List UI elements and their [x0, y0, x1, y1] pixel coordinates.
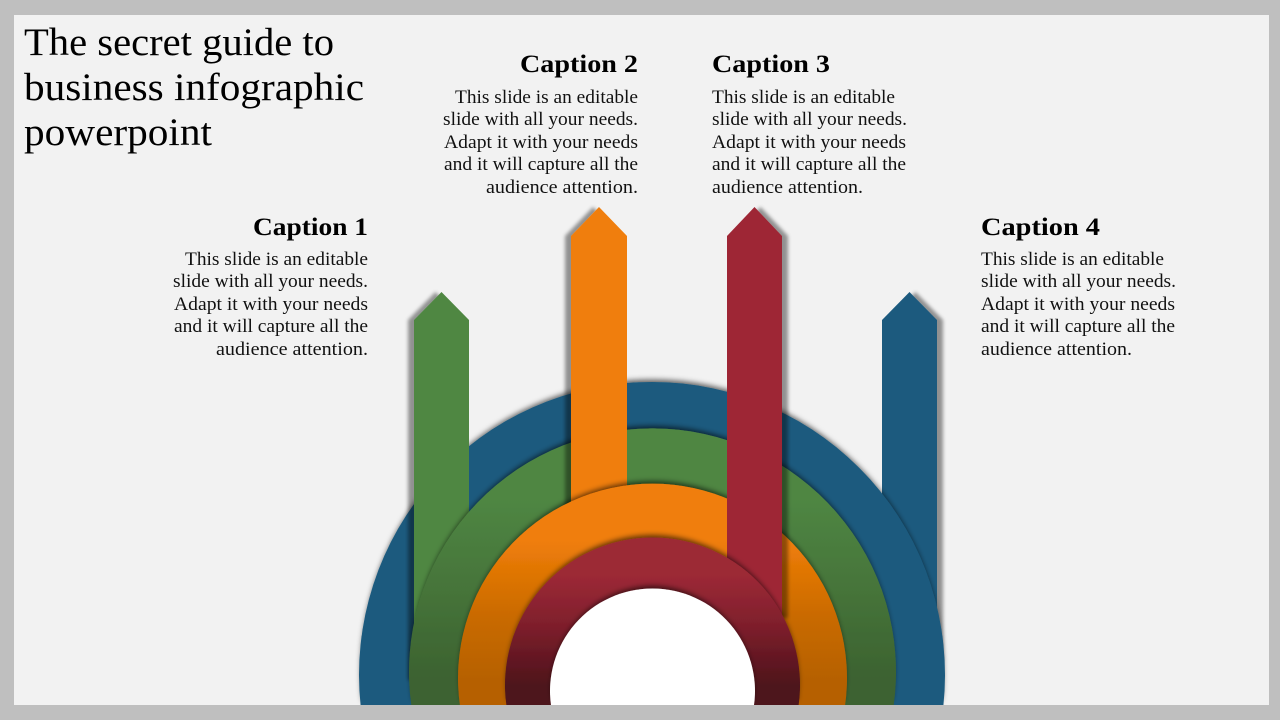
caption 1: audience attention.	[216, 339, 368, 360]
caption 3: slide with all your needs.	[712, 109, 907, 130]
title	[24, 21, 364, 154]
caption 3: This slide is an editable	[712, 87, 895, 108]
arrow: green	[414, 292, 469, 680]
caption 1: Caption 1	[253, 214, 368, 241]
caption 4: Adapt it with your needs	[981, 294, 1175, 315]
caption 1: This slide is an editable	[185, 249, 368, 270]
caption 2: Caption 2	[520, 51, 638, 78]
caption 4	[981, 214, 1176, 360]
caption 4: and it will capture all the	[981, 316, 1175, 337]
caption 2	[443, 51, 638, 198]
arrow: orange	[571, 207, 627, 560]
arch: green	[409, 428, 896, 706]
arch: maroon	[505, 538, 800, 706]
caption 1: Adapt it with your needs	[174, 294, 368, 315]
caption 4: audience attention.	[981, 339, 1132, 360]
nested arch diagram	[359, 207, 945, 706]
caption 2: slide with all your needs.	[443, 109, 638, 130]
caption 4: Caption 4	[981, 214, 1101, 241]
arch: blue	[359, 382, 945, 706]
title: powerpoint	[24, 111, 212, 154]
caption 2: and it will capture all the	[444, 154, 638, 175]
caption 2: audience attention.	[486, 177, 638, 198]
caption 2: This slide is an editable	[455, 87, 638, 108]
caption 3	[712, 51, 907, 198]
caption 4: This slide is an editable	[981, 249, 1164, 270]
arrow: red	[727, 207, 782, 618]
caption 2: Adapt it with your needs	[444, 132, 638, 153]
caption 3: Caption 3	[712, 51, 830, 78]
caption 3: and it will capture all the	[712, 154, 906, 175]
title: business infographic	[24, 66, 364, 109]
arch: orange	[458, 484, 847, 706]
caption 1: slide with all your needs.	[173, 271, 368, 292]
caption 3: Adapt it with your needs	[712, 132, 906, 153]
caption 4: slide with all your needs.	[981, 271, 1176, 292]
arrow: blue	[882, 292, 937, 660]
title: The secret guide to	[24, 21, 334, 64]
caption 1: and it will capture all the	[174, 316, 368, 337]
caption 1	[173, 214, 368, 360]
center white circle	[550, 589, 755, 706]
caption 3: audience attention.	[712, 177, 863, 198]
